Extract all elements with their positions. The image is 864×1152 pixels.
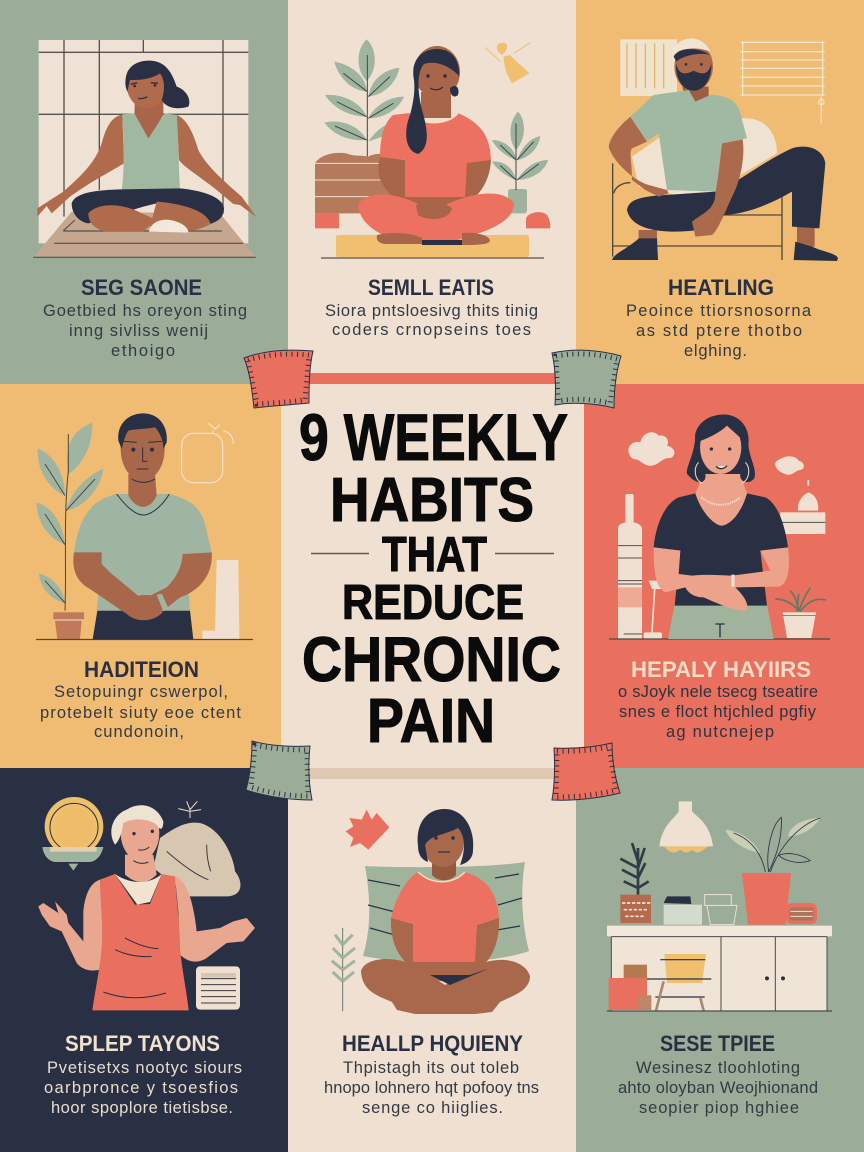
description: Siora pntsloesivg thits tinig xyxy=(325,302,538,320)
description: hoor spoplore tietisbse. xyxy=(51,1099,233,1117)
description: Pvetisetxs nootyc siours xyxy=(47,1059,242,1077)
title xyxy=(299,400,568,756)
icon: folded towels xyxy=(196,966,240,1010)
description: as std ptere thotbo xyxy=(636,322,802,340)
icon: plant left xyxy=(324,39,404,157)
description: ag nutcnejep xyxy=(666,723,774,741)
heading: HADITEION xyxy=(84,657,199,682)
panel: title center xyxy=(281,384,584,768)
icon: round mirror lamp xyxy=(42,797,103,871)
title: 9 WEEKLY xyxy=(299,400,568,474)
description: cundonoin, xyxy=(94,723,184,741)
heading: SEMLL EATIS xyxy=(368,275,494,300)
title: PAIN xyxy=(367,687,495,756)
heading: HEPALY HAYIIRS xyxy=(631,657,811,682)
panel: older woman xyxy=(0,768,288,1152)
icon: pillow xyxy=(363,862,529,962)
panel: stretching man xyxy=(576,0,864,384)
description xyxy=(324,1059,539,1117)
description: protebelt siuty eoe ctent xyxy=(40,704,241,722)
figure: woman xyxy=(361,809,530,1014)
icon: clouds xyxy=(628,432,804,475)
description: ahto oloyban Weojhionand xyxy=(618,1079,818,1097)
description: oarbpronce y tsoesfios xyxy=(44,1079,238,1097)
description: hnopo lohnero hqt pofooy tns xyxy=(324,1079,539,1097)
icon: ceiling lamp xyxy=(659,801,713,852)
icon: stand cup xyxy=(644,581,674,639)
icon: blinds xyxy=(740,41,825,123)
icon: shelf with diffuser xyxy=(780,480,825,534)
icon: sprig xyxy=(332,928,355,1011)
heading: SESE TPIEE xyxy=(660,1031,775,1056)
description xyxy=(44,1059,242,1117)
heading: SEG SAONE xyxy=(81,275,202,300)
icon: tag right xyxy=(552,743,620,800)
description: Goetbied hs oreyon sting xyxy=(43,302,247,320)
title: THAT xyxy=(382,528,487,582)
figure: older woman xyxy=(38,805,255,1010)
bottom ribbon with tags xyxy=(246,741,620,800)
description: o sJoyk nele tsecg tseatire xyxy=(618,683,818,701)
icon: right plant and block xyxy=(492,112,550,228)
top ribbon with tags xyxy=(244,350,621,408)
description xyxy=(618,1059,818,1117)
description: ethoigo xyxy=(111,342,175,360)
panel: seated woman on pillow xyxy=(288,768,576,1152)
icon: small angel xyxy=(485,43,530,83)
description: Wesinesz tloohloting xyxy=(636,1059,800,1077)
icon: tag left xyxy=(244,350,313,408)
icon: leaf star xyxy=(346,810,389,850)
icon: small plant xyxy=(775,588,826,638)
description xyxy=(626,302,812,360)
icon: tag right xyxy=(552,350,621,408)
icon: tag left xyxy=(246,741,312,800)
description: coders crnopseins toes xyxy=(332,321,531,339)
icon: bottle xyxy=(202,560,239,639)
description: Setopuingr cswerpol, xyxy=(54,683,228,701)
icon: cushion backdrop xyxy=(632,118,777,200)
title: CHRONIC xyxy=(302,625,561,695)
description xyxy=(40,683,241,741)
icon: cabinet xyxy=(607,926,832,1011)
icon: sketch frame xyxy=(182,423,233,483)
description: senge co hiiglies. xyxy=(362,1099,503,1117)
description: Thpistagh its out toleb xyxy=(343,1059,519,1077)
heading: HEALLP HQUIENY xyxy=(342,1031,523,1056)
heading: SPLEP TAYONS xyxy=(65,1031,220,1056)
heading: HEATLING xyxy=(668,275,774,300)
icon: sack xyxy=(153,801,240,896)
title: HABITS xyxy=(330,466,534,535)
icon: window and mat xyxy=(33,40,256,257)
mat xyxy=(336,235,529,257)
icon: bench frame xyxy=(613,163,782,260)
icon: potted plant xyxy=(37,422,103,639)
panel: woman in dark shirt xyxy=(584,384,864,768)
icon: bench xyxy=(315,153,405,228)
icon: potted plant xyxy=(725,817,820,925)
description xyxy=(43,302,247,360)
icon: stool and boxes xyxy=(609,954,711,1011)
panel: kitchen shelf xyxy=(576,768,864,1152)
icon: tall bottle xyxy=(618,494,642,639)
description: elghing. xyxy=(684,342,747,360)
figure: meditating woman xyxy=(37,61,257,233)
icon: jars and radio xyxy=(664,895,817,925)
description: seopier piop hghiee xyxy=(639,1099,799,1117)
description xyxy=(618,683,818,741)
figure: man in green xyxy=(73,413,212,639)
figure: man stretching xyxy=(609,38,838,261)
figure: woman in coral xyxy=(358,46,514,245)
icon: radiator xyxy=(620,39,677,96)
panel: seated meditation xyxy=(0,0,288,384)
title: REDUCE xyxy=(342,576,524,630)
icon: small plant xyxy=(620,843,651,923)
description: Peoince ttiorsnosorna xyxy=(626,302,812,320)
panel: seated woman with plants xyxy=(288,0,576,384)
description: inng sivliss wenij xyxy=(69,322,208,340)
figure: woman xyxy=(654,415,789,639)
panel: standing man with plant xyxy=(0,384,281,768)
description xyxy=(325,302,538,339)
description: snes e floct htjchled pgfiy xyxy=(619,703,817,721)
